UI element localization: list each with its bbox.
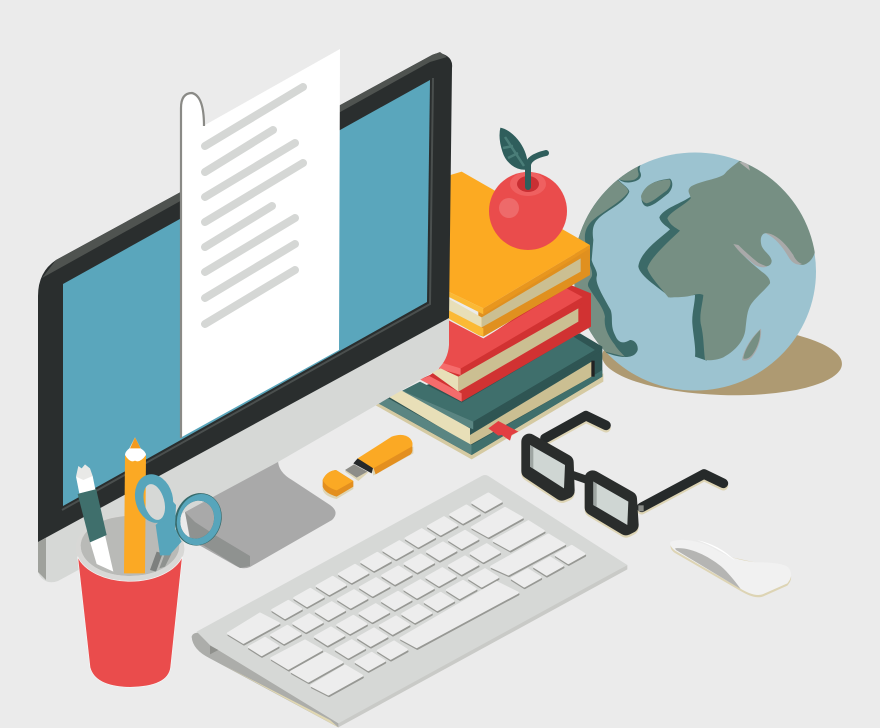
bezel	[38, 53, 452, 542]
paper sheet	[180, 49, 340, 438]
globe sphere	[574, 152, 816, 390]
globe with shadow	[574, 152, 842, 396]
wide keys	[228, 508, 565, 696]
continents	[574, 160, 815, 361]
highlight	[499, 198, 519, 218]
pen cup front	[76, 546, 184, 687]
cup lip	[76, 546, 184, 582]
red book	[420, 283, 591, 402]
cup body	[78, 557, 182, 687]
mouse shaded side	[675, 548, 741, 589]
pen cup	[76, 437, 184, 582]
lenses	[530, 445, 565, 488]
stack of books	[375, 172, 603, 459]
apple	[489, 127, 567, 250]
screen	[63, 80, 430, 506]
pencil	[124, 437, 146, 573]
keys	[249, 494, 585, 672]
stand	[185, 460, 336, 568]
frame	[529, 442, 631, 527]
monitor	[38, 52, 452, 582]
cup rim	[76, 515, 184, 582]
chin	[38, 318, 449, 582]
paper curl outline	[181, 93, 204, 438]
globe shadow	[601, 321, 843, 399]
glasses shadow	[529, 418, 723, 530]
keyboard body	[192, 565, 627, 727]
stem and leaf	[499, 127, 528, 170]
keyboard	[192, 475, 627, 727]
text lines	[205, 87, 303, 324]
yellow book	[445, 172, 590, 337]
bookmark	[488, 421, 518, 441]
mouse	[670, 540, 791, 597]
teal book	[375, 333, 603, 459]
bezel highlight	[42, 52, 447, 278]
scissors	[130, 470, 229, 555]
USB stick	[323, 435, 413, 499]
scissors blades	[150, 552, 163, 572]
temples	[545, 416, 723, 507]
pen	[76, 464, 113, 572]
glasses	[529, 416, 723, 530]
